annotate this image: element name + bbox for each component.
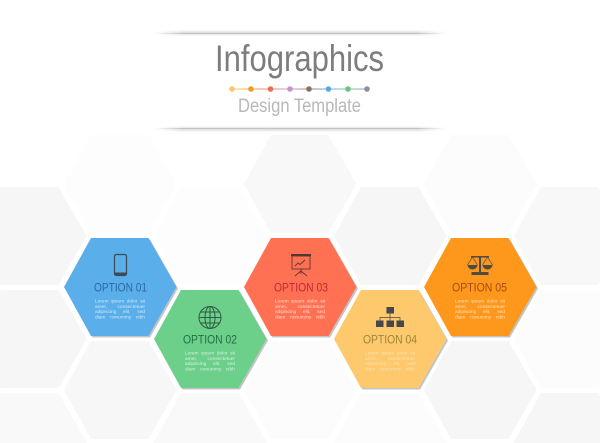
body text: nibh: [406, 366, 415, 372]
body text: sit: [410, 350, 416, 356]
body text: amet,: [275, 304, 287, 310]
body text: nibh: [316, 314, 325, 320]
bottom rule: [155, 128, 445, 130]
subtitle: Design Template: [238, 96, 361, 117]
body text: consectetuer: [478, 304, 505, 310]
body text: sed: [407, 361, 415, 367]
body text: ipsum: [201, 350, 214, 356]
body text: dolor: [397, 350, 408, 356]
background honeycomb pattern: [0, 135, 600, 443]
body text: amet,: [95, 304, 107, 310]
option 03: [244, 238, 358, 338]
body text: dolor: [217, 350, 228, 356]
icon: scales of justice: [468, 256, 492, 275]
body text: sit: [230, 350, 236, 356]
body text: sit: [500, 298, 506, 304]
body text: [185, 350, 236, 372]
icon: organisation chart: [376, 307, 404, 327]
body text: amet,: [455, 304, 467, 310]
body text: dolor: [127, 298, 138, 304]
body text: Lorem: [275, 298, 289, 304]
body text: diam: [275, 314, 285, 320]
option label: OPTION 03: [274, 283, 328, 295]
body text: Lorem: [365, 350, 379, 356]
body text: sit: [320, 298, 326, 304]
body text: amet,: [365, 356, 377, 362]
body text: nonummy: [470, 316, 492, 320]
option label: OPTION 05: [452, 283, 507, 295]
body text: [455, 298, 506, 320]
body text: nonummy: [200, 368, 222, 372]
body text: nonummy: [290, 316, 312, 320]
option label: OPTION 04: [363, 335, 418, 347]
body text: elit,: [123, 309, 130, 315]
body text: elit,: [483, 309, 490, 315]
body text: nonummy: [110, 316, 132, 320]
body text: diam: [455, 314, 465, 320]
icon: smartphone: [114, 254, 126, 276]
body text: elit,: [213, 361, 220, 367]
body text: [365, 350, 416, 372]
body text: elit,: [393, 361, 400, 367]
option 04: [334, 290, 448, 390]
body text: sed: [317, 309, 325, 315]
body text: dolor: [307, 298, 318, 304]
option label: OPTION 01: [94, 283, 147, 295]
body text: sed: [137, 309, 145, 315]
icon: globe: [199, 306, 221, 328]
top rule: [155, 32, 445, 34]
header panel: [155, 32, 445, 130]
body text: diam: [95, 314, 105, 320]
body text: nibh: [496, 314, 505, 320]
body text: consectetuer: [388, 356, 415, 362]
body text: adipiscing: [95, 309, 117, 315]
body text: ipsum: [111, 298, 124, 304]
body text: diam: [365, 366, 375, 372]
body text: adipiscing: [275, 309, 297, 315]
body text: Lorem: [95, 298, 109, 304]
body text: adipiscing: [185, 361, 207, 367]
body text: dolor: [487, 298, 498, 304]
body text: consectetuer: [298, 304, 325, 310]
body text: ipsum: [291, 298, 304, 304]
body text: [95, 298, 146, 320]
timeline of coloured dots: [229, 86, 370, 92]
body text: nonummy: [380, 368, 402, 372]
body text: diam: [185, 366, 195, 372]
body text: sed: [227, 361, 235, 367]
option 05: [424, 238, 538, 338]
title: Infographics: [215, 38, 384, 79]
body text: Lorem: [455, 298, 469, 304]
icon: presentation board: [291, 254, 311, 276]
option 01: [64, 238, 178, 338]
body text: [275, 298, 326, 320]
body text: sit: [140, 298, 146, 304]
body text: Lorem: [185, 350, 199, 356]
option label: OPTION 02: [183, 335, 237, 347]
body text: consectetuer: [208, 356, 235, 362]
option 02: [154, 290, 268, 390]
body text: nibh: [136, 314, 145, 320]
body text: sed: [497, 309, 505, 315]
body text: ipsum: [381, 350, 394, 356]
body text: consectetuer: [118, 304, 145, 310]
body text: amet,: [185, 356, 197, 362]
body text: adipiscing: [455, 309, 477, 315]
body text: ipsum: [471, 298, 484, 304]
body text: nibh: [226, 366, 235, 372]
body text: elit,: [303, 309, 310, 315]
body text: adipiscing: [365, 361, 387, 367]
